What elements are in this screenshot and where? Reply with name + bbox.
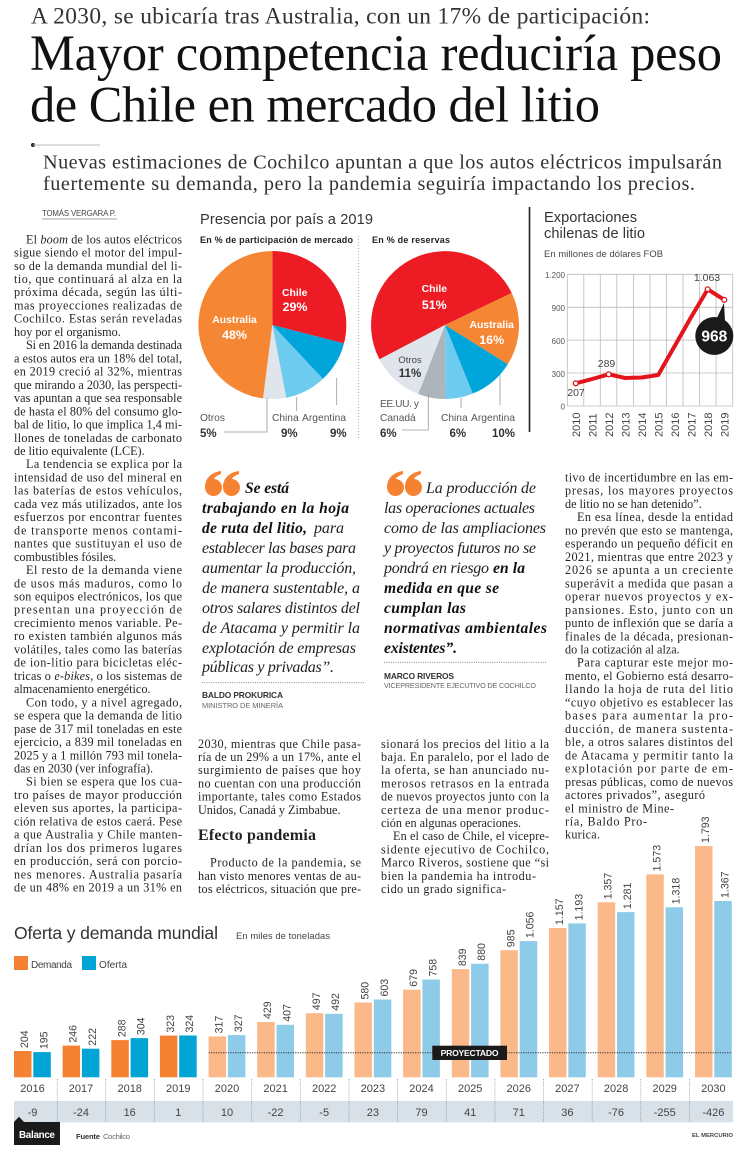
article column 1: volátiles, tales como las baterías: [14, 642, 182, 656]
bar values: 1.193: [573, 894, 585, 920]
decorative bullet rule: [31, 143, 100, 147]
article column 4: tivo de incertidumbre en las em-: [565, 470, 733, 484]
heading: exportaciones: Exportaciones: [544, 210, 637, 226]
x axis years: 2021: [263, 1083, 288, 1095]
x axis years: 2016: [20, 1083, 45, 1095]
panel: oferta y demanda: [14, 816, 733, 1145]
attribution: MARCO RIVEROS: [384, 671, 454, 681]
article column 4: finales de la década, presionan-: [565, 629, 733, 643]
article column 1: de un 48% en 2019 a un 31% en: [14, 880, 182, 894]
article column 1: las baterías de estos vehículos,: [14, 484, 182, 498]
title: Mayor competencia reduciría peso: [30, 25, 722, 81]
balance values: 16: [124, 1107, 136, 1119]
bars: historical: [14, 1036, 197, 1077]
article column 1: próxima década, según las últi-: [14, 285, 182, 299]
article column 1: en producción, será con porcio-: [14, 854, 182, 868]
pie labels: reserves: 6%: [380, 428, 397, 440]
icon: quotation mark: [387, 471, 422, 496]
balance values: [28, 1107, 724, 1119]
x axis years: [571, 413, 732, 437]
pie chart: market share: Australia: [212, 315, 257, 326]
bar values: 1.793: [700, 816, 712, 843]
kicker: A 2030, se ubicaría tras Australia, con un 17% de participación:: [31, 3, 650, 29]
pull quote: Marco Riveros: existentes”.: [384, 640, 457, 657]
pull quote: Marco Riveros: en la: [493, 560, 525, 577]
bar values: 204: [19, 1030, 31, 1048]
article column 4: ducción, de manera sustenta-: [565, 722, 733, 736]
pull quote: Baldo Prokurica: explotación de empresas: [202, 640, 356, 657]
article column 3: baja. En paralelo, por el lado de: [381, 750, 549, 764]
x axis years: 2017: [69, 1083, 93, 1095]
pie chart: reserves: Chile: [422, 284, 447, 295]
article column 1: 2025 y a 1 millón 793 mil tonela-: [14, 748, 182, 762]
x axis years: 2028: [604, 1083, 628, 1095]
pie chart: reserves: Otros: [398, 355, 422, 366]
balance values: 1: [175, 1107, 181, 1119]
article column 3: merosos retrasos en la entrada: [381, 776, 550, 790]
article column 4: do la cotización al alza.: [565, 642, 680, 656]
pie labels: market share: China: [272, 413, 299, 424]
x axis years: [20, 1083, 726, 1095]
attribution: [202, 690, 283, 710]
line chart: 1.200: [545, 271, 566, 280]
bar values: 323: [165, 1015, 177, 1033]
x axis years: 2013: [620, 413, 632, 437]
deck: fuertemente su demanda, pero la pandemia seguiría impactando los precios.: [43, 173, 695, 195]
subheading: efecto pandemia: Efecto pandemia: [198, 827, 316, 844]
pie labels: market share: 5%: [200, 428, 217, 440]
article column 1: bal de litio, lo que implica 1,4 mi-: [14, 418, 182, 432]
article column 1: crecimiento menos variable. Pe-: [14, 616, 182, 630]
article column 1: mas proyecciones realizadas de: [14, 298, 182, 312]
article column 4: 2021, mientras que entre 2023 y: [565, 550, 734, 564]
attribution: MINISTRO DE MINERÍA: [202, 701, 283, 710]
pull quote: Baldo Prokurica: aumentar la producción,: [202, 560, 356, 577]
balance values: -9: [28, 1107, 37, 1119]
line chart: 289: [598, 358, 615, 370]
article column 1: vas apuntan a que sea responsable: [14, 391, 182, 405]
line chart: 0: [561, 402, 566, 412]
article column 1: se espera que la demanda de litio: [14, 709, 182, 723]
article column 1: sigue siendo el motor del impul-: [14, 246, 182, 260]
title: [30, 25, 722, 133]
article column 1: de litio equivalente (LCE).: [14, 444, 145, 458]
bar values: 304: [136, 1017, 148, 1035]
pull quote: Marco Riveros: pondrá en riesgo: [383, 560, 489, 577]
x axis years: 2017: [686, 413, 698, 437]
pie chart: market share: Chile: [282, 288, 308, 299]
balance values: -255: [654, 1107, 676, 1119]
x axis years: 2016: [670, 413, 682, 437]
article column 4: llando la hoja de ruta del litio: [565, 682, 733, 696]
pie labels: market share: [200, 378, 347, 440]
heading: presencia: Presencia por país a 2019: [200, 212, 373, 228]
bar values: 985: [505, 929, 517, 947]
article column 3: Marco Riveros, sostiene que “si: [381, 856, 550, 870]
x axis years: 2018: [117, 1083, 142, 1095]
article column 4: [565, 470, 734, 842]
pie chart: reserves: [371, 251, 519, 399]
pie labels: reserves: 10%: [492, 428, 515, 440]
bar values: 839: [457, 948, 469, 966]
article column 2: han visto menores ventas de au-: [198, 869, 361, 883]
line chart: 1.063: [694, 272, 720, 284]
x axis years: 2010: [571, 413, 583, 437]
pull quote: Marco Riveros: cumplan las: [384, 600, 466, 617]
legend: [14, 956, 127, 971]
bar values: 497: [311, 992, 323, 1010]
article column 4: kurica.: [565, 828, 600, 842]
x axis years: 2022: [312, 1083, 336, 1095]
article column 1: de ion-litio para bicicletas eléc-: [14, 656, 182, 670]
article column 1: La tendencia se explica por la: [26, 457, 183, 471]
x axis years: 2020: [215, 1083, 239, 1095]
article column 4: mento, el Gobierno está desarro-: [565, 669, 733, 683]
article column 3: En el caso de Chile, el vicepre-: [393, 829, 549, 843]
pull quote: Baldo Prokurica: [201, 471, 365, 710]
article column 2: tos eléctricos, situación que pre-: [198, 882, 361, 896]
deck: Nuevas estimaciones de Cochilco apuntan a que los autos eléctricos impulsarán: [43, 151, 722, 173]
subheading: participacion de mercado: En % de participación de mercado: [200, 235, 354, 245]
credit: EL MERCURIO: [692, 1133, 733, 1139]
pie labels: reserves: Canadá: [380, 413, 416, 424]
article column 4: En esa línea, desde la entidad: [577, 510, 733, 524]
attribution: VICEPRESIDENTE EJECUTIVO DE COCHILCO: [384, 681, 536, 690]
pie labels: market share: 9%: [281, 428, 298, 440]
pie labels: reserves: Argentina: [471, 413, 515, 424]
article column 3: sidente ejecutivo de Cochilco,: [381, 842, 549, 856]
bar values: 1.573: [651, 845, 663, 871]
article column 3: cido un grado significa-: [381, 882, 506, 896]
article column 3: ción en algunas operaciones.: [381, 816, 521, 830]
tag: proyectado: PROYECTADO: [441, 1048, 499, 1058]
article column 4: no prevén que esto se mantenga,: [565, 523, 733, 537]
bar values: 1.318: [671, 878, 683, 904]
pie chart: market share: 29%: [283, 300, 307, 314]
article column 4: explotación por parte de em-: [565, 762, 733, 776]
legend: Demanda: [31, 960, 72, 971]
pull quote: Marco Riveros: y proyectos futuros no se: [382, 540, 536, 557]
article column 4: 2026 se apunta a un creciente: [565, 563, 733, 577]
balance values: 79: [415, 1107, 428, 1119]
pie labels: market share: Argentina: [302, 413, 346, 424]
x axis years: 2015: [654, 413, 666, 437]
pie chart: market share: [198, 251, 346, 399]
article column 3: sionará los precios del litio a la: [381, 737, 550, 751]
pie chart: reserves: 51%: [422, 298, 447, 312]
bar values: 1.367: [719, 871, 731, 898]
heading: exportaciones: chilenas de litio: [544, 226, 645, 242]
article column 1: pase de 317 mil toneladas en este: [14, 722, 182, 736]
pull quote: Marco Riveros: normativas ambientales: [384, 620, 547, 637]
x axis years: 2012: [604, 413, 616, 437]
bar values: 195: [38, 1031, 50, 1049]
callout: 968: 968: [701, 328, 728, 346]
x axis years: 2024: [409, 1083, 434, 1095]
bar values: 1.281: [622, 882, 634, 909]
bars: projected: [209, 846, 732, 1077]
source: Fuente: [76, 1132, 100, 1141]
bar values: 246: [68, 1025, 80, 1043]
pull quote: Baldo Prokurica: de ruta del litio,: [202, 520, 307, 537]
title: de Chile en mercado del litio: [30, 77, 600, 133]
bar values: 492: [330, 993, 342, 1011]
x axis years: 2019: [720, 413, 732, 437]
article column 4: el ministro de Mine-: [565, 801, 674, 815]
x axis years: 2019: [166, 1083, 191, 1095]
pie chart: reserves: 16%: [479, 333, 504, 347]
article column 1: ro existen también algunos más: [14, 629, 182, 643]
article column 1: Si bien se espera que los cua-: [26, 775, 182, 789]
bar values: 327: [233, 1014, 245, 1032]
unit note: En miles de toneladas: [236, 930, 330, 941]
article column 4: Para capturar este mejor mo-: [577, 656, 733, 670]
balance values: 41: [464, 1107, 476, 1119]
balance values: 23: [367, 1107, 379, 1119]
pull quote: Marco Riveros: La producción de: [425, 480, 536, 497]
article column 1: El resto de la demanda viene: [26, 563, 182, 577]
article column 1: presentan una proyección de: [14, 603, 182, 617]
article column 4: punto de inflexión que se daría a: [565, 616, 734, 630]
article column 1: so de la demanda mundial del li-: [14, 259, 182, 273]
pie chart: reserves: Australia: [469, 320, 514, 331]
bar values: 880: [476, 943, 488, 961]
article column 4: ría, Baldo Pro-: [565, 814, 647, 828]
heading: oferta y demanda: Oferta y demanda mundial: [14, 923, 218, 943]
article column 4: presas, los mayores proyectos: [565, 484, 733, 498]
heading: exportaciones: [544, 210, 645, 242]
article column 2: surgimiento de países que hoy: [198, 763, 362, 777]
pull quote: Baldo Prokurica: públicas y privadas”.: [201, 659, 334, 676]
article column 4: presas públicas, como de nuevos: [565, 775, 733, 789]
pull quote: Baldo Prokurica: de Atacama y permitir la: [202, 620, 360, 637]
article column 1: das en 2030 (ver infografía).: [14, 762, 153, 776]
line chart: 900: [552, 304, 566, 313]
line chart: 207: [567, 387, 585, 399]
article column 4: “cuyo objetivo es establecer las: [565, 695, 733, 709]
bar values: 407: [282, 1004, 294, 1022]
pie labels: reserves: 6%: [450, 428, 466, 440]
bar values: 317: [214, 1016, 226, 1033]
pull quote: Baldo Prokurica: Se está: [245, 480, 289, 497]
balance values: -76: [608, 1107, 624, 1119]
article column 1: de usos más maduros, como lo: [14, 576, 182, 590]
balance values: 36: [561, 1107, 574, 1119]
article column 3: certeza de una menor produc-: [381, 803, 549, 817]
article column 1: hoy por el organismo.: [14, 325, 121, 339]
article column 2: ría de un 29% a un 17%, ante el: [198, 750, 362, 764]
article column 1: El boom de los autos eléctricos: [26, 232, 182, 246]
article column 2: [198, 737, 362, 896]
bar values: 580: [360, 982, 372, 1000]
bar values: 603: [379, 979, 391, 996]
balance values: -24: [73, 1107, 89, 1119]
pull quote: Marco Riveros: las operaciones actuales: [384, 500, 535, 517]
article column 4: de Atacama y permitir tanto la: [565, 748, 734, 762]
article column 3: de nuevos proyectos junto con la: [381, 790, 550, 804]
article column 1: drían los dos primeros lugares: [14, 841, 182, 855]
article column 1: son equipos electrónicos, los que: [14, 590, 182, 604]
balance values: -5: [319, 1107, 329, 1119]
bar values: 1.056: [525, 911, 537, 938]
pull quote: Baldo Prokurica: otros salares distintos del: [202, 600, 361, 617]
x axis years: 2023: [361, 1083, 385, 1095]
article column 1: combustibles fósiles.: [14, 550, 116, 564]
x axis years: 2030: [701, 1083, 726, 1095]
x axis years: 2014: [637, 413, 649, 437]
article column 3: bien la pandemia ha introdu-: [381, 869, 536, 883]
article column 1: eleven sus aportes, la participa-: [14, 801, 182, 815]
pull quote: Marco Riveros: como de las ampliaciones: [384, 520, 546, 537]
article column 1: tricas o e-bikes, o los sistemas de: [14, 669, 182, 683]
pie labels: reserves: China: [441, 413, 468, 424]
article column 4: ble, a otros salares distintos del: [565, 735, 734, 749]
article column 1: de hasta el 80% del consumo glo-: [14, 404, 182, 418]
panel: exportaciones: [544, 210, 733, 437]
bar values: 1.357: [603, 873, 615, 899]
article column 3: [381, 737, 550, 896]
x axis years: 2026: [507, 1083, 531, 1095]
tag: balance: Balance: [19, 1130, 56, 1141]
byline: TOMÁS VERGARA P.: [42, 209, 116, 218]
pull quote: Baldo Prokurica: trabajando en la hoja: [202, 500, 349, 517]
article column 1: cada vez más utilizados, ante los: [14, 497, 182, 511]
pie labels: reserves: EE.UU. y: [380, 399, 420, 410]
article column 1: que mirando a 2030, las perspecti-: [14, 378, 182, 392]
article column 1: almacenamiento energético.: [14, 682, 150, 696]
article column 4: esperando un pequeño déficit en: [565, 537, 733, 551]
x axis years: 2027: [555, 1083, 580, 1095]
article column 3: la oferta, se han anunciado nu-: [381, 763, 549, 777]
article column 1: [14, 232, 183, 895]
article column 1: tro países de mayor producción: [14, 788, 182, 802]
article column 4: de litio no se han detenido”.: [565, 497, 702, 511]
article column 4: operar nuevos proyectos y ex-: [565, 590, 733, 604]
pie chart: market share: 48%: [222, 328, 247, 342]
line chart: [545, 271, 733, 437]
deck: [43, 151, 722, 195]
bar values: 324: [184, 1015, 196, 1032]
source: Cochilco: [103, 1132, 130, 1141]
bar values: 1.157: [554, 898, 566, 925]
source: [76, 1132, 130, 1141]
bar values: 679: [408, 969, 420, 987]
bar values: 429: [262, 1001, 274, 1019]
article column 1: intensidad de uso del mineral en: [14, 470, 182, 484]
pull quote: Baldo Prokurica: establecer las bases para: [202, 540, 356, 557]
article column 1: Si en 2016 la demanda destinada: [26, 338, 183, 352]
attribution: BALDO PROKURICA: [202, 690, 283, 700]
article column 1: Con todo, y a nivel agregado,: [26, 695, 182, 709]
line chart: 600: [552, 337, 566, 346]
article column 1: llones de toneladas de carbonato: [14, 431, 182, 445]
article column 1: tio, que continuará al alza en la: [14, 272, 183, 286]
bar values: 288: [116, 1019, 128, 1037]
article column 1: nantes que sustituyan el uso de: [14, 537, 182, 551]
unit note: En millones de dólares FOB: [544, 248, 663, 259]
bar values: [19, 816, 731, 1049]
pull quote: Baldo Prokurica: de manera sustentable, a: [202, 580, 360, 597]
bar values: 758: [427, 959, 439, 976]
tag: balance: [14, 1117, 60, 1145]
pie chart: reserves: 11%: [399, 368, 421, 380]
attribution: [384, 671, 536, 690]
balance values: -426: [702, 1107, 724, 1119]
x axis years: 2025: [458, 1083, 482, 1095]
article column 2: 2030, mientras que Chile pasa-: [198, 737, 361, 751]
x axis years: 2018: [703, 413, 715, 437]
tag: proyectado: [432, 1046, 507, 1060]
balance values: 71: [513, 1107, 525, 1119]
article column 1: a estos autos era un 18% del total,: [14, 351, 182, 365]
article column 1: ción relativa de estos caerá. Pese: [14, 814, 182, 828]
balance values: -22: [268, 1107, 284, 1119]
article column 2: no cuentan con una producción: [198, 776, 361, 790]
article column 2: Unidos, Canadá y Zimbabue.: [198, 803, 340, 817]
pie labels: reserves: [380, 375, 515, 440]
line chart: 300: [552, 370, 566, 379]
pull quote: Marco Riveros: [382, 471, 547, 690]
divider: [528, 207, 530, 432]
article column 1: Cochilco. Estas serán reveladas: [14, 312, 182, 326]
x axis years: 2011: [588, 413, 600, 437]
article column 1: en 2019 creció al 32%, mientras: [14, 365, 182, 379]
article column 1: de transporte menos contami-: [14, 523, 182, 537]
article column 4: pansiones. Esto, junto con un: [565, 603, 733, 617]
icon: quotation mark: [205, 471, 240, 496]
article column 1: esfuerzos por encontrar fuentes: [14, 510, 182, 524]
article column 1: ejercicio, a 839 mil toneladas en: [14, 735, 182, 749]
bar values: 222: [87, 1028, 99, 1046]
article column 1: a que Australia y Chile manten-: [14, 828, 182, 842]
legend: Oferta: [99, 960, 127, 971]
balance values: 10: [221, 1107, 233, 1119]
article column 1: nes menores. Australia pasaría: [14, 867, 183, 881]
pull quote: Baldo Prokurica: para: [313, 520, 344, 537]
article column 4: bases para aumentar la pro-: [565, 709, 733, 723]
balance band: [14, 1101, 733, 1122]
article column 2: importante, tales como Estados: [198, 790, 361, 804]
pie labels: market share: 9%: [330, 428, 347, 440]
x axis years: 2029: [652, 1083, 677, 1095]
article column 4: actores privados”, aseguró: [565, 788, 705, 802]
article column 4: superávit a medida que pasan a: [565, 576, 734, 590]
callout: 968: [695, 303, 733, 355]
subheading: reservas: En % de reservas: [372, 235, 450, 245]
panel: presencia por pais: [198, 212, 519, 440]
article column 2: Producto de la pandemia, se: [210, 856, 361, 870]
pull quote: Marco Riveros: medida en que se: [384, 580, 499, 597]
pie labels: market share: Otros: [200, 413, 225, 424]
